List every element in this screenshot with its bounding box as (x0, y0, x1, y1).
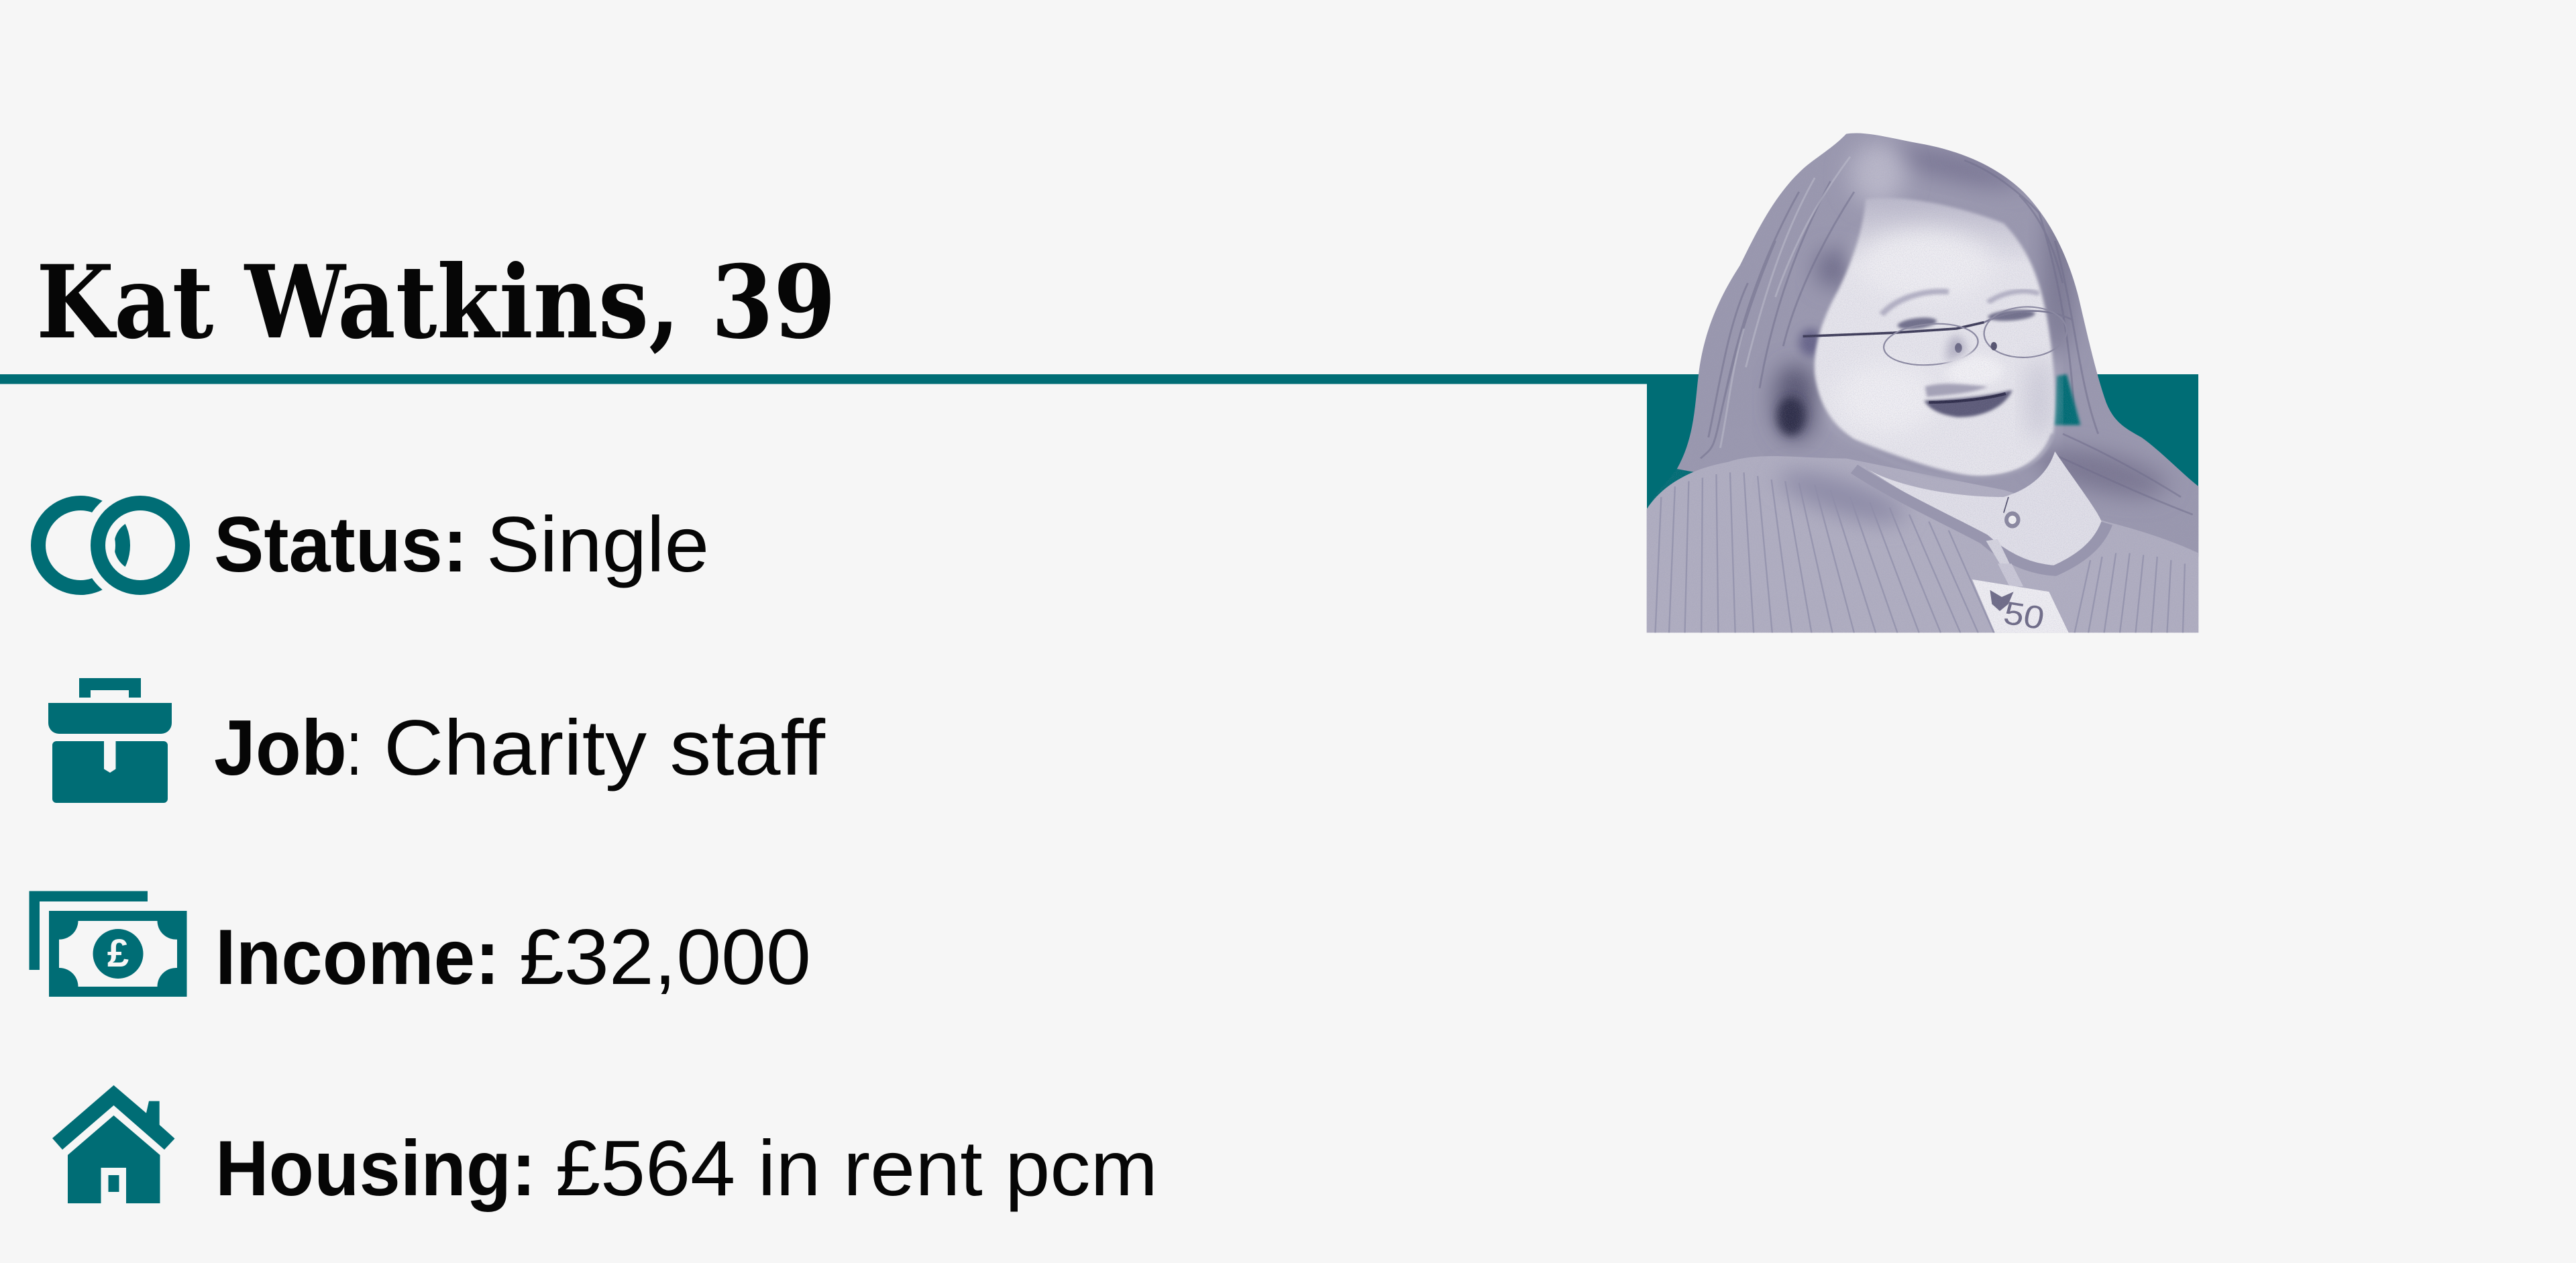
teal gap in hair (2053, 374, 2080, 425)
hair (1677, 133, 2198, 557)
row: income (30, 891, 811, 1001)
photo grain texture (1648, 168, 2101, 633)
status text: Status: (214, 500, 468, 588)
icon: banknotes (30, 891, 186, 997)
nose (1945, 335, 2004, 386)
icon: wedding rings (38, 503, 182, 588)
housing text: Housing: (215, 1124, 536, 1212)
teal block (1647, 374, 2198, 633)
name badge (1972, 539, 2069, 637)
housing text: £564 in rent pcm (555, 1124, 1158, 1212)
mouth (1924, 384, 2012, 417)
job text: : (346, 704, 362, 791)
job text: Charity staff (384, 704, 826, 791)
cardigan (1647, 456, 2198, 633)
icon: briefcase (48, 678, 172, 803)
row: status (38, 500, 709, 588)
title: Kat Watkins, 39 (36, 243, 836, 362)
job text: Job (214, 704, 347, 791)
income text: Income: (215, 913, 500, 1001)
profile infographic (0, 133, 2199, 1212)
icon: house (52, 1085, 174, 1203)
portrait (1647, 129, 2198, 637)
icon: banknotes: £ (107, 932, 129, 975)
row: job (48, 678, 826, 803)
glasses (1803, 305, 2073, 368)
eyes and brows (1882, 291, 2039, 331)
portrait photo on teal block (1647, 129, 2198, 637)
status text: Single (486, 500, 709, 588)
heading rule (0, 374, 1650, 384)
name badge: 50 (2000, 594, 2047, 637)
neck and chest (1854, 451, 2107, 571)
face (1815, 198, 2055, 478)
row: housing (52, 1085, 1158, 1212)
income text: £32,000 (519, 913, 811, 1001)
